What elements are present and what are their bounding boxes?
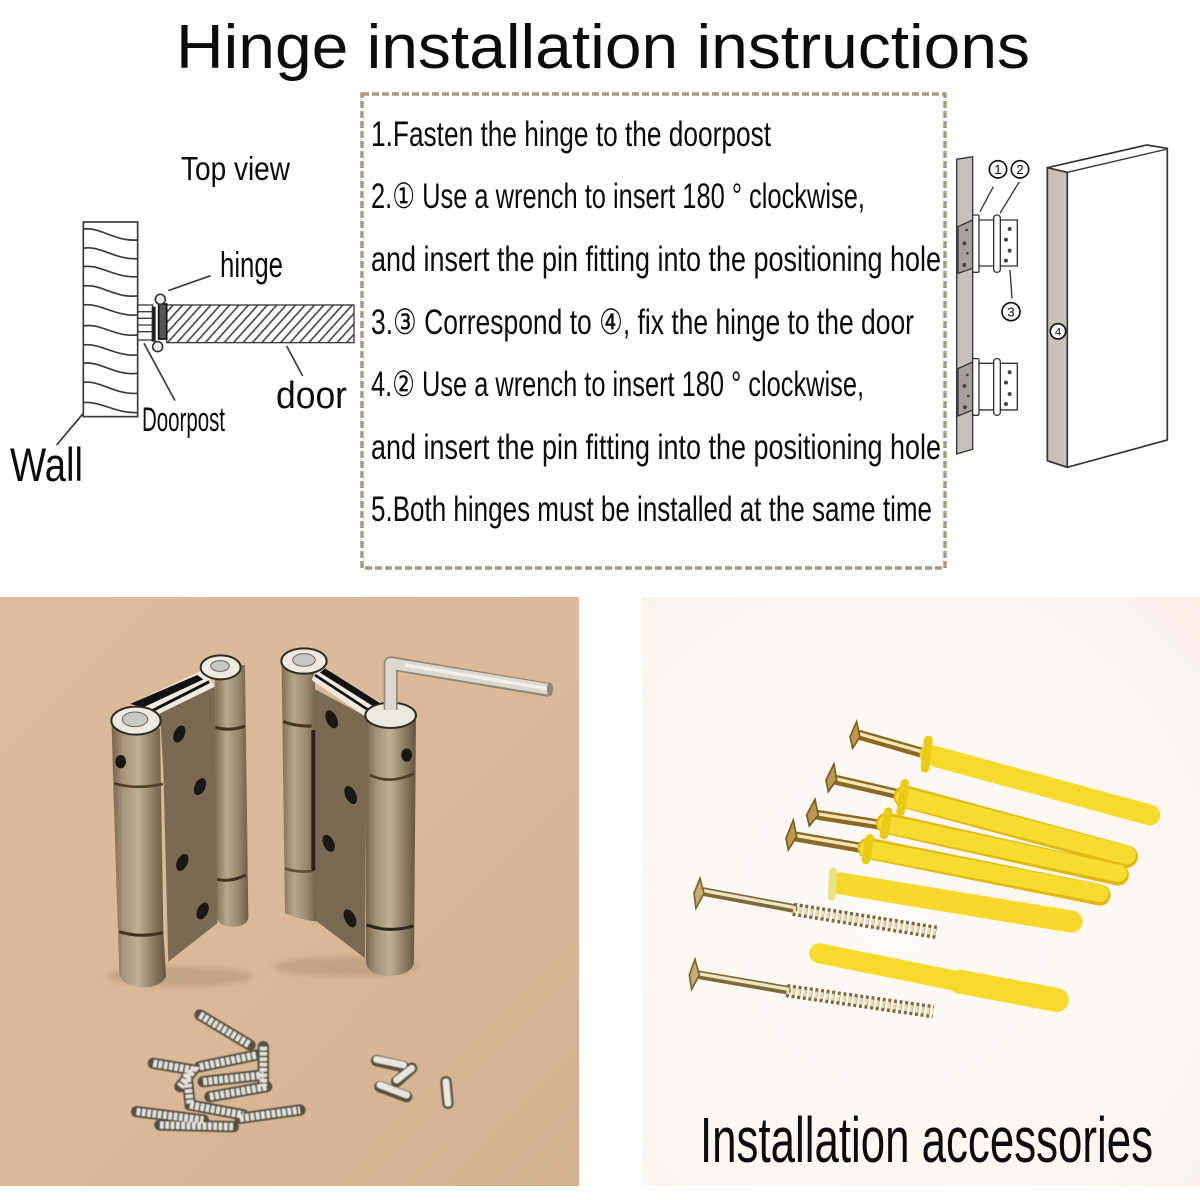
- panel: installation steps: [362, 94, 945, 568]
- panel: door and hinge exploded diagram: 2: [1016, 162, 1024, 177]
- step 1: 1.Fasten the hinge to the doorpost: [371, 115, 771, 154]
- doorpost strip: [957, 157, 973, 454]
- hex wrench: [391, 663, 549, 710]
- photo background: [0, 597, 579, 1186]
- panel: door and hinge exploded diagram: 4: [1055, 327, 1061, 339]
- step 4 line 2: and insert the pin fitting into the positioning hole: [371, 428, 941, 467]
- wood screws: [689, 878, 938, 1012]
- lower hinge: [958, 359, 1017, 416]
- yellow anchors: [819, 740, 1150, 1000]
- nails: [786, 722, 922, 850]
- left hinge: [111, 655, 248, 987]
- label: door: door: [276, 375, 347, 417]
- callout lines: [980, 182, 1019, 298]
- step 5: 5.Both hinges must be installed at the same time: [371, 490, 932, 529]
- hinges and wrench: [107, 648, 553, 987]
- label: doorpost: Doorpost: [142, 401, 225, 439]
- panel: door and hinge exploded diagram: 1: [994, 162, 1002, 177]
- heading: top view: Top view: [181, 150, 290, 187]
- door panel: [1047, 145, 1167, 467]
- panel: installation accessories: [642, 597, 1200, 1186]
- right hinge: [281, 648, 553, 976]
- dashed border: [362, 94, 945, 568]
- label: hinge: hinge: [220, 244, 283, 285]
- panel: top view diagram: [10, 150, 354, 491]
- title: Hinge installation instructions: [176, 13, 1030, 82]
- panel: door and hinge exploded diagram: [957, 145, 1167, 467]
- panel: door and hinge exploded diagram: 3: [1007, 305, 1015, 320]
- callout numbers: [989, 161, 1066, 339]
- step 3: 3.③ Correspond to ④, fix the hinge to the door: [371, 303, 914, 342]
- step 2 line 2: and insert the pin fitting into the positioning hole: [371, 240, 941, 279]
- drawing: wall, doorpost, hinge and door section: [57, 222, 354, 445]
- panel: hinge photo: [0, 597, 579, 1186]
- step 2 line 1: 2.① Use a wrench to insert 180 ° clockwise,: [371, 177, 865, 216]
- small screws and pins: [137, 1015, 448, 1127]
- photo background: [642, 597, 1200, 1186]
- anchors and screws: [689, 722, 1150, 1012]
- label: wall: Wall: [10, 438, 83, 491]
- upper hinge: [958, 215, 1017, 273]
- step 4 line 1: 4.② Use a wrench to insert 180 ° clockwise,: [371, 365, 864, 404]
